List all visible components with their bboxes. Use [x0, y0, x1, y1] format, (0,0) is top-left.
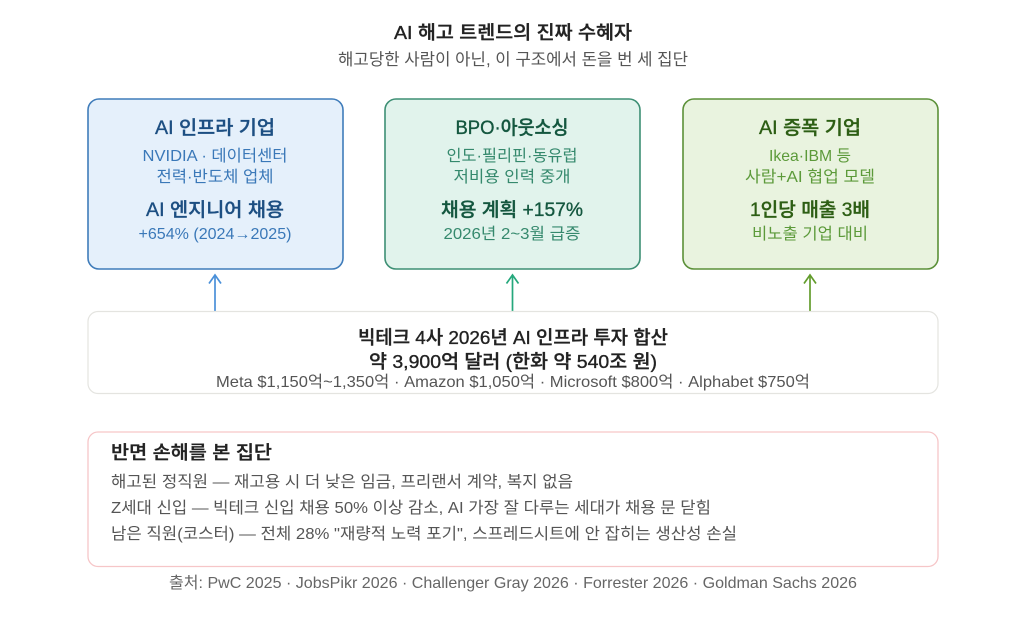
- text: augmentation companies: [745, 148, 875, 186]
- text: BPO regions: 저비용 인력 중개: [454, 168, 570, 186]
- arrow: to BPO: [506, 275, 518, 311]
- text: infrastructure companies: NVIDIA · 데이터센터: [142, 147, 288, 165]
- panel: BPO outsourcing: [385, 99, 640, 269]
- text: infrastructure companies: 전력·반도체 업체: [156, 168, 274, 186]
- stat: revenue per person: 1인당 매출 3배: [750, 199, 870, 221]
- text: Gen Z entry-level: Z세대 신입 — 빅테크 신입 채용 50% 이상 감소, AI 가장 잘 다루는 세대가 채용 문 닫힘: [111, 499, 711, 517]
- heading: AI infrastructure: AI 인프라 기업: [155, 117, 275, 139]
- heading: AI augmentation: AI 증폭 기업: [759, 117, 861, 139]
- panel: big tech investment: [88, 312, 938, 394]
- stat detail: +654% (2024→2025): [138, 226, 292, 243]
- stat: hiring plan: 채용 계획 +157%: [441, 199, 583, 221]
- heading: BPO: BPO·아웃소싱: [456, 117, 568, 139]
- stat detail: 2026년 2~3월 급증: [444, 225, 580, 243]
- stat detail: 비노출 기업 대비: [752, 225, 868, 243]
- text: laid-off full-time employees: 해고된 정직원 — 재고용 시 더 낮은 임금, 프리랜서 계약, 복지 없음: [111, 473, 573, 491]
- heading: investment total: 빅테크 4사 2026년 AI 인프라 투자 합산: [358, 327, 668, 348]
- text: augmentation companies: Ikea·IBM 등: [769, 148, 851, 165]
- text: augmentation companies: 사람+AI 협업 모델: [745, 168, 875, 186]
- heading: losers: 반면 손해를 본 집단: [111, 442, 272, 463]
- text: remaining employees: 남은 직원(코스터) — 전체 28% "재량적 노력 포기", 스프레드시트에 안 잡히는 생산성 손실: [111, 525, 737, 543]
- arrow: to AI augmentation: [804, 275, 816, 311]
- text: infrastructure companies: [142, 147, 288, 186]
- panel: AI augmentation companies: [683, 99, 938, 269]
- text: per-company breakdown: Meta $1,150억~1,350억 · Amazon $1,050억 · Microsoft $800억 · Alphabet $750억: [216, 373, 810, 391]
- panel: groups that lost out: [88, 432, 938, 566]
- heading: investment amount: 약 3,900억 달러 (한화 약 540조 원): [369, 351, 657, 372]
- title: AI 해고 트렌드의 진짜 수혜자: [394, 22, 632, 43]
- text: BPO regions: 인도·필리핀·동유럽: [446, 147, 578, 165]
- source note: 출처: PwC 2025 · JobsPikr 2026 · Challenger Gray 2026 · Forrester 2026 · Goldman Sachs 2026: [169, 574, 857, 592]
- panel: AI infrastructure companies: [88, 99, 343, 269]
- subtitle: 해고당한 사람이 아닌, 이 구조에서 돈을 번 세 집단: [338, 50, 688, 69]
- stat: AI engineer hiring: AI 엔지니어 채용: [146, 199, 284, 221]
- text: BPO regions: [446, 147, 578, 186]
- arrow: to AI infrastructure: [209, 275, 221, 311]
